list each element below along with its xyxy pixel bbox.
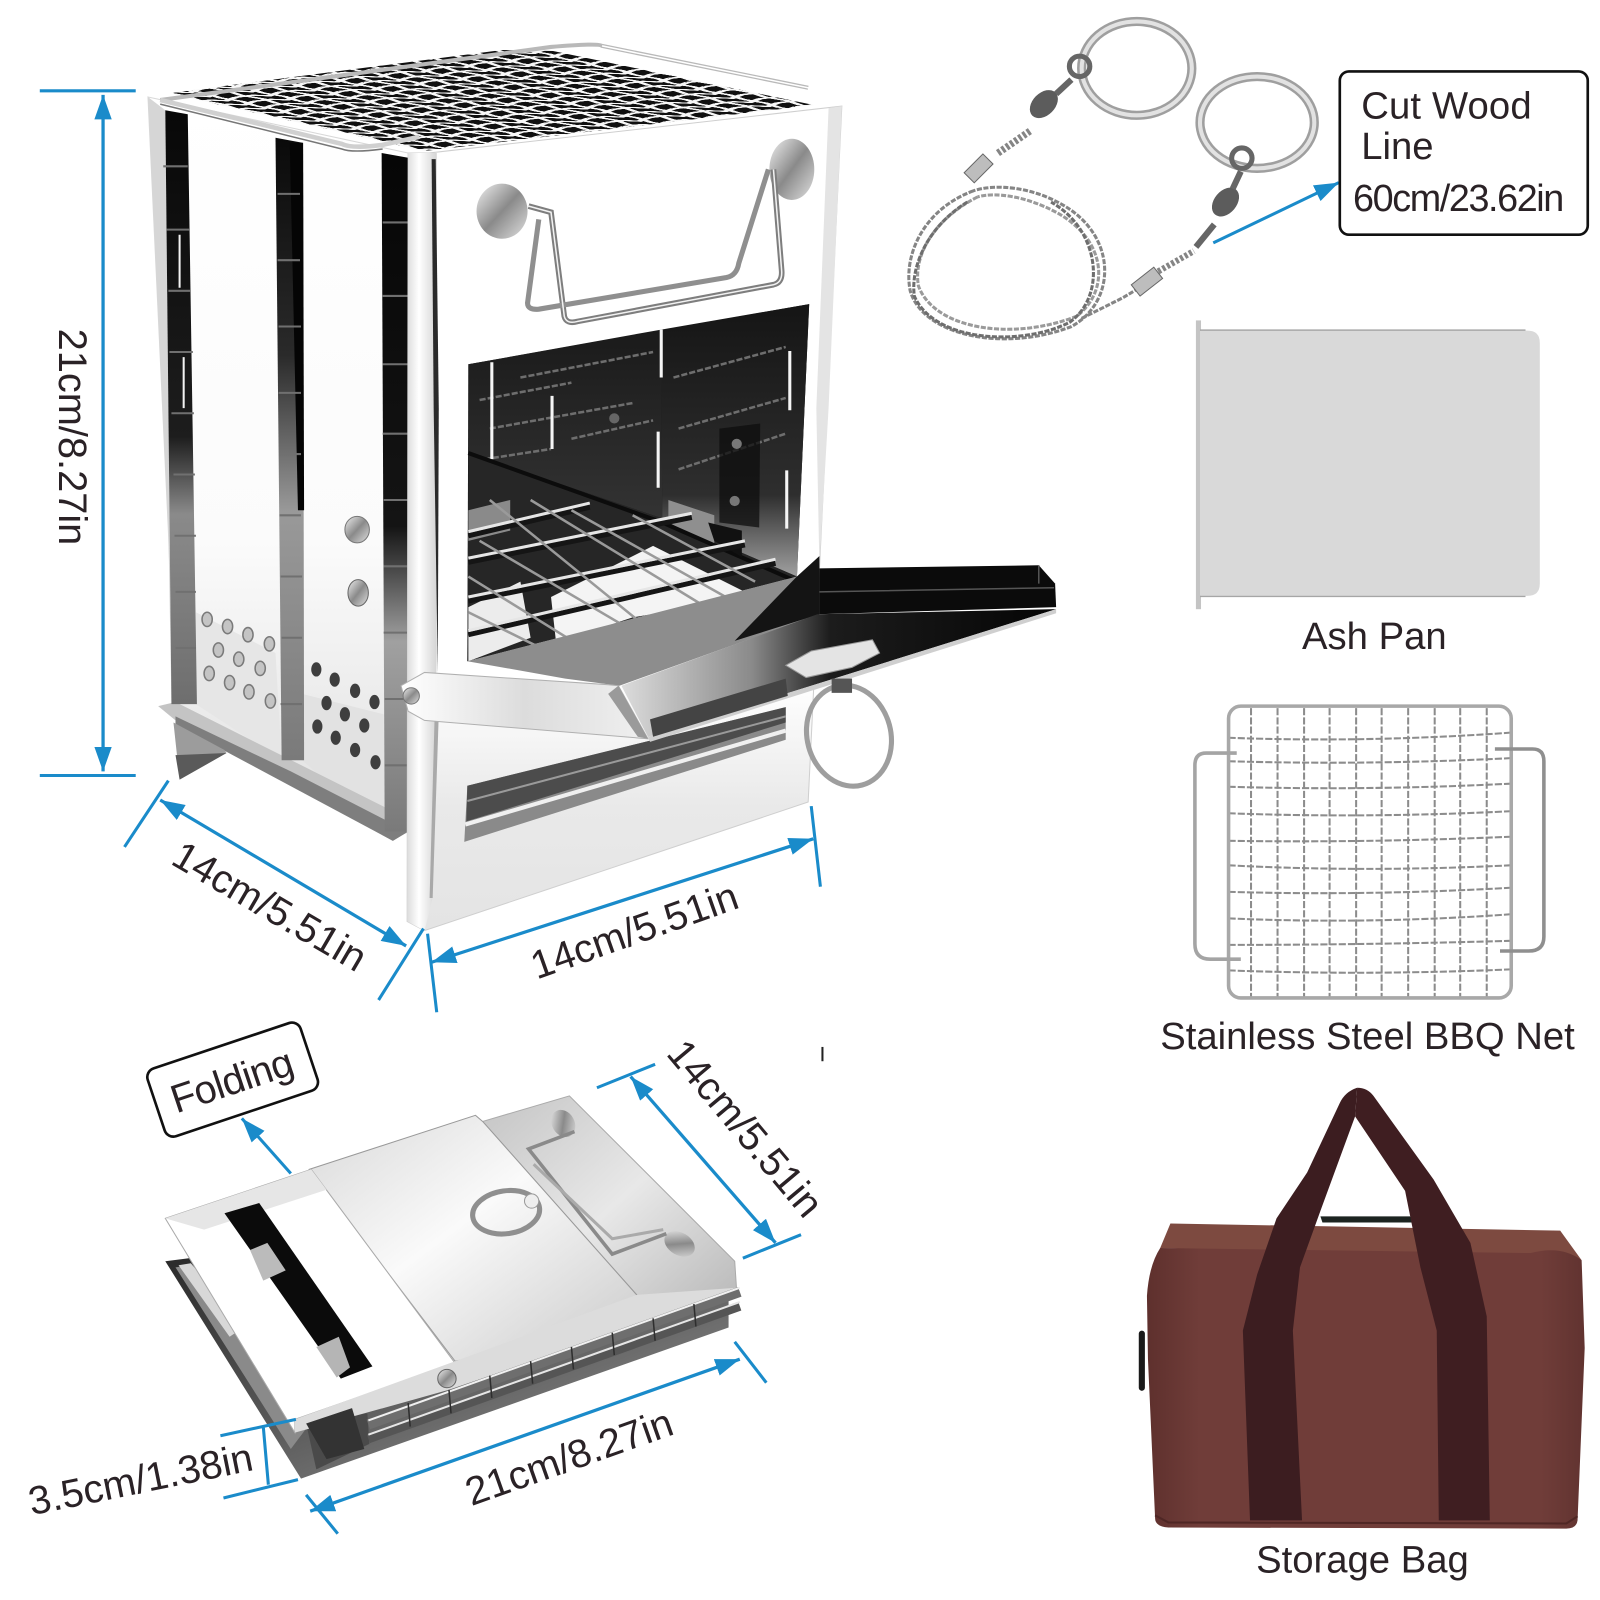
callout: folding: Folding — [165, 1040, 299, 1122]
folded handle — [529, 1105, 699, 1262]
callout arrow to saw — [1213, 183, 1339, 243]
bag right strap — [1355, 1088, 1490, 1520]
callout: cut wood line: Cut Wood — [1361, 84, 1532, 127]
ash pan label: Ash Pan — [1302, 615, 1447, 658]
callout: folding — [145, 1020, 320, 1139]
saw swivels and ferrules — [964, 80, 1245, 296]
panel: storage bag — [1139, 1088, 1585, 1581]
bag top face — [1160, 1223, 1582, 1260]
net label: Stainless Steel BBQ Net — [1160, 1015, 1575, 1058]
side rivets — [345, 516, 369, 606]
panel: assembled stove — [148, 45, 1056, 931]
panel: ash pan — [1196, 320, 1540, 658]
saw wire loop — [909, 131, 1194, 339]
dimension: folded length 21cm: 21cm/8.27in — [460, 1401, 679, 1515]
dimension: width 14cm: 14cm/5.51in — [525, 874, 744, 988]
dimension: width 14cm — [428, 806, 820, 1012]
panel: folded stove — [165, 1096, 740, 1479]
callout: cut wood line — [1340, 71, 1588, 235]
dimension: depth 14cm — [124, 781, 423, 1000]
folded right panel — [483, 1096, 737, 1322]
folded left panel — [165, 1169, 455, 1433]
dimension: folded depth 14cm: 14cm/5.51in — [658, 1032, 831, 1226]
dimension: height 21cm: 21cm/8.27in — [50, 329, 94, 545]
bag zipper line — [1320, 1216, 1413, 1222]
dimension: folded length 21cm — [306, 1342, 766, 1534]
panel: wire saw — [909, 21, 1314, 339]
vent holes left panel — [202, 612, 276, 708]
stove left side panels — [148, 97, 410, 841]
bag body — [1147, 1248, 1585, 1529]
bag label: Storage Bag — [1256, 1538, 1469, 1581]
folded tray underside — [165, 1258, 729, 1479]
callout arrow to folding — [242, 1118, 291, 1173]
vent holes middle panel — [311, 662, 381, 769]
dimension: folded height 3.5cm: 3.5cm/1.38in — [25, 1436, 257, 1524]
net frame and handles — [1195, 706, 1544, 998]
bag left strap — [1243, 1088, 1357, 1520]
net wire grid — [1229, 708, 1510, 998]
stove front face — [407, 106, 842, 931]
bag zipper pull — [1139, 1331, 1145, 1391]
callout: cut wood line: Line — [1361, 125, 1434, 168]
folded main panel — [309, 1115, 640, 1361]
folded hinges — [295, 1288, 740, 1459]
dimension: depth 14cm: 14cm/5.51in — [165, 833, 374, 980]
firebox window — [467, 304, 809, 661]
saw rings — [1069, 21, 1314, 168]
carry handle — [477, 139, 814, 322]
door tray — [401, 556, 1056, 742]
panel: BBQ net — [1160, 706, 1575, 1058]
stray mark — [821, 1047, 823, 1061]
door ring — [795, 676, 903, 796]
callout: cut wood line: 60cm/23.62in — [1353, 177, 1564, 219]
dimension: folded depth 14cm — [597, 1032, 831, 1258]
dimension: height 21cm — [40, 91, 136, 776]
lower vent slot — [464, 707, 786, 842]
top grill mesh — [160, 45, 816, 151]
folded ring — [470, 1186, 542, 1238]
